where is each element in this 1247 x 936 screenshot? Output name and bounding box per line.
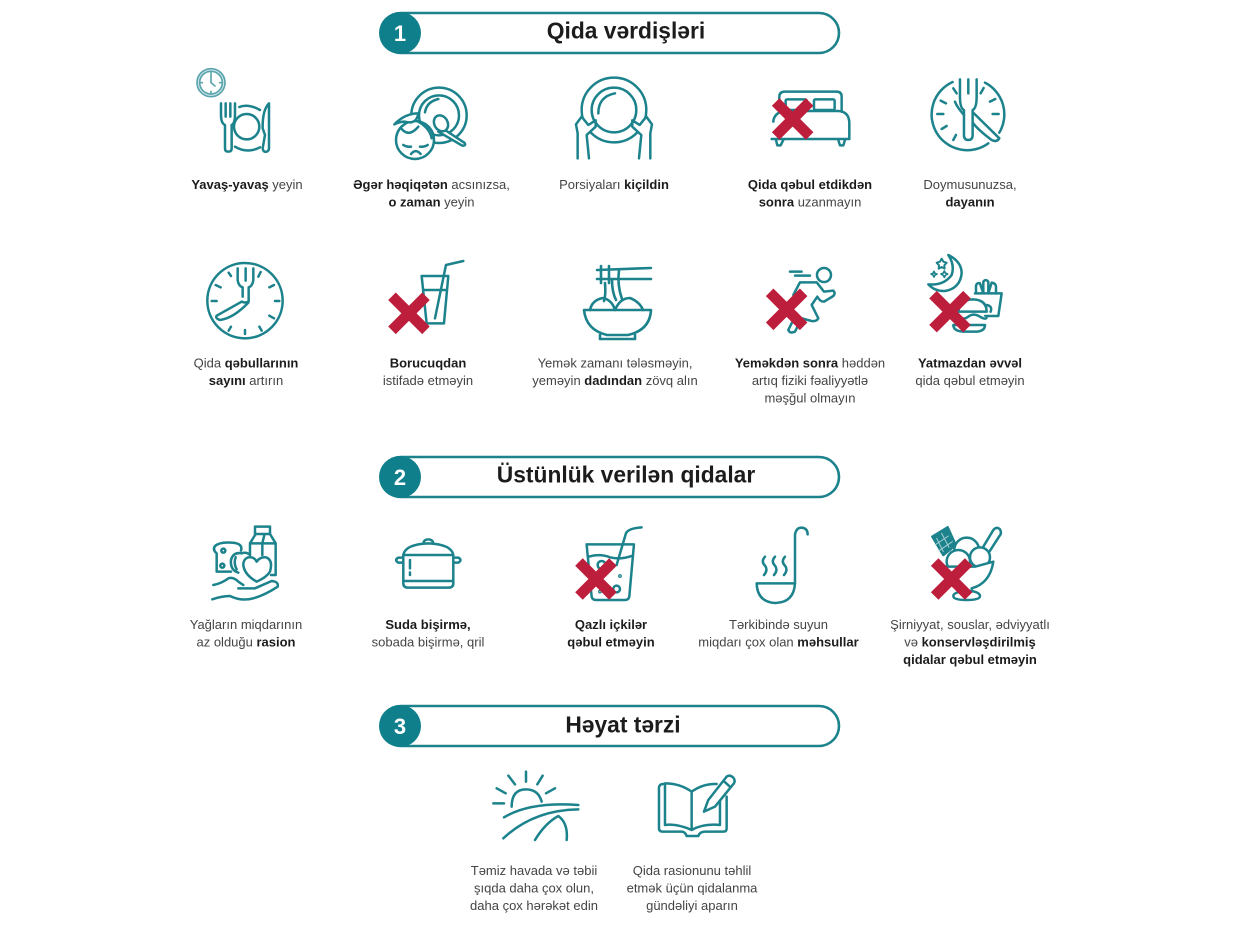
item: increase meal count — [194, 263, 298, 388]
text: keep a food diary: etmək üçün qidalanma — [627, 880, 758, 896]
heading: section 3: 3 — [394, 714, 406, 739]
text: high water content products: miqdarı çox olan məhsullar — [698, 634, 859, 650]
text: stop when full: dayanın — [945, 194, 995, 210]
text: increase meal count: sayını artırın — [209, 373, 283, 388]
item: high water content products — [698, 528, 859, 650]
icon: clock, fork, plate and knife — [197, 69, 269, 152]
text: savor food: Yemək zamanı tələsməyin, — [538, 356, 692, 370]
text: eat only when hungry: o zaman yeyin — [389, 194, 474, 210]
icon: clock with fork hands — [207, 263, 283, 338]
text: keep a food diary: gündəliyi aparın — [646, 898, 738, 913]
text: low fat diet: Yağların miqdarının — [190, 617, 302, 632]
text: do not eat before bed: Yatmazdan əvvəl — [918, 356, 1022, 370]
icon: crossed-out soda glass — [579, 527, 642, 600]
panel: section 2 preferred foods — [190, 456, 1050, 667]
text: do not eat before bed: qida qəbul etməyin — [915, 373, 1025, 388]
icon: crossed-out ice cream sundae — [932, 527, 1001, 600]
item: boiling and baking — [372, 539, 484, 650]
heading: section 1: Qida vərdişləri — [547, 18, 705, 44]
icon: ladle with steam — [757, 528, 808, 603]
text: increase meal count: Qida qəbullarının — [194, 356, 298, 370]
text: no sweets, sauces, canned food: qidalar qəbul etməyin — [903, 652, 1037, 667]
text: do not use straws: Borucuqdan — [390, 356, 466, 370]
icon: crossed-out bed — [772, 92, 849, 145]
item: keep a food diary — [627, 776, 758, 913]
text: keep a food diary: Qida rasionunu təhlil — [633, 863, 751, 878]
text: no excessive exercise after eating: Yeməkdən sonra həddən — [735, 356, 885, 370]
text: high water content products: Tərkibində suyun — [729, 617, 828, 632]
panel: section 1 eating habits — [191, 12, 1025, 406]
heading: section 3 — [379, 705, 839, 747]
text: do not lie down after eating: sonra uzanmayın — [759, 194, 861, 210]
item: no excessive exercise after eating — [735, 268, 885, 406]
item: eat slowly — [191, 69, 303, 192]
icon: cooking pot — [396, 539, 460, 588]
heading: section 1: 1 — [394, 21, 406, 46]
heading: section 1 — [379, 12, 839, 54]
item: stop when full — [923, 79, 1017, 210]
item: fresh air and movement — [470, 772, 598, 913]
text: no carbonated drinks: qəbul etməyin — [567, 634, 655, 650]
text: no sweets, sauces, canned food: Şirniyyat, souslar, ədviyyatlı — [890, 617, 1050, 632]
text: no excessive exercise after eating: artıq fiziki fəaliyyətlə — [752, 373, 868, 388]
item: no carbonated drinks — [567, 527, 655, 650]
icon: noodle bowl with chopsticks — [584, 266, 651, 339]
item: eat only when hungry — [353, 88, 510, 210]
text: fresh air and movement: daha çox hərəkət edin — [470, 898, 598, 913]
item: reduce portions — [559, 78, 669, 192]
icon: sad child with plate and spoon — [394, 88, 467, 159]
item: no sweets, sauces, canned food — [890, 527, 1050, 667]
heading: section 3: Həyat tərzi — [565, 712, 681, 738]
icon: crossed-out glass with straw — [392, 261, 463, 330]
heading: section 2: Üstünlük verilən qidalar — [497, 462, 755, 488]
text: boiling and baking: sobada bişirmə, qril — [372, 634, 484, 650]
text: eat slowly: Yavaş-yavaş yeyin — [191, 177, 303, 192]
text: low fat diet: az olduğu rasion — [196, 634, 296, 650]
text: no carbonated drinks: Qazlı içkilər — [575, 617, 647, 632]
item: do not use straws — [383, 261, 473, 388]
text: reduce portions: Porsiyaları kiçildin — [559, 177, 669, 192]
text: savor food: yeməyin dadından zövq alın — [532, 373, 698, 388]
item: do not eat before bed — [915, 255, 1025, 388]
item: do not lie down after eating — [748, 92, 872, 210]
text: do not lie down after eating: Qida qəbul etdikdən — [748, 177, 872, 192]
icon: crossed-out runner — [770, 268, 835, 333]
text: fresh air and movement: Təmiz havada və təbii — [471, 863, 597, 878]
icon: crossed-out moon, fries and burger — [928, 255, 1002, 332]
panel: section 3 lifestyle — [379, 705, 839, 913]
text: eat only when hungry: Əgər həqiqətən acsınızsa, — [353, 177, 510, 192]
heading: section 2 — [379, 456, 839, 498]
text: stop when full: Doymusunuzsa, — [923, 177, 1017, 192]
icon: hands holding plate — [576, 78, 652, 158]
icon: clock with fork and knife — [932, 79, 1004, 150]
icon: sun over fields — [493, 772, 578, 840]
text: do not use straws: istifadə etməyin — [383, 373, 473, 388]
icon: open book with pencil — [659, 776, 735, 836]
item: savor food — [532, 266, 698, 388]
text: no sweets, sauces, canned food: və konservləşdirilmiş — [904, 634, 1036, 650]
item: low fat diet — [190, 527, 302, 650]
text: no excessive exercise after eating: məşğul olmayın — [764, 390, 856, 406]
text: boiling and baking: Suda bişirmə, — [385, 617, 471, 632]
icon: hand holding bread, milk and heart — [212, 527, 278, 600]
text: fresh air and movement: şıqda daha çox olun, — [474, 880, 594, 896]
heading: section 2: 2 — [394, 465, 406, 490]
